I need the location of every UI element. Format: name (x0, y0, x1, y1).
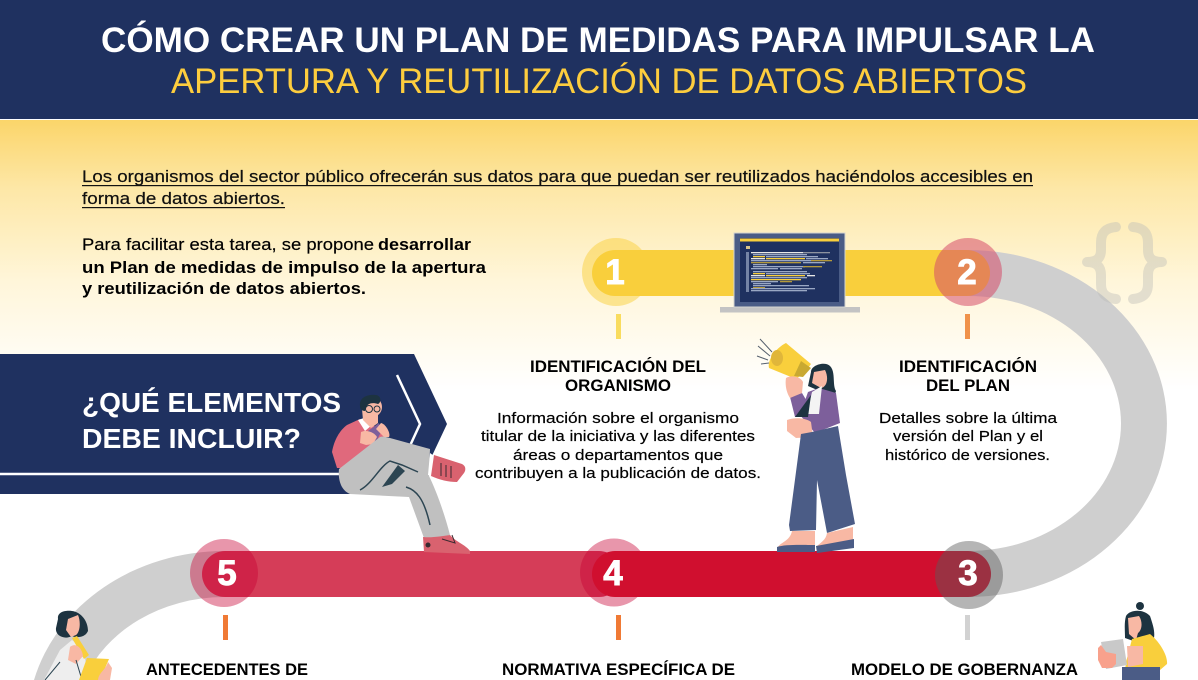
icon: laptop with code (720, 233, 860, 312)
figure: woman with tablet (1098, 602, 1167, 680)
gray curved path right (968, 250, 1167, 597)
title: CÓMO CREAR UN PLAN DE MEDIDAS PARA IMPULSAR LA (101, 20, 1095, 60)
title: APERTURA Y REUTILIZACIÓN DE DATOS ABIERTOS (171, 62, 1027, 101)
banner heading (82, 387, 341, 454)
proposal paragraph: Para facilitar esta tarea, se propone (82, 235, 374, 254)
number 4: 4 (603, 554, 623, 593)
tick step 5 (223, 615, 228, 640)
number 1: 1 (605, 253, 625, 292)
number 3: 3 (958, 554, 978, 593)
figure: man sitting with phone (332, 395, 470, 554)
proposal paragraph (82, 235, 487, 298)
step 4 halo (580, 538, 648, 606)
step 2 text: histórico de versiones. (885, 447, 1050, 464)
tick step 4 (616, 615, 621, 640)
step 3 halo (935, 541, 1003, 609)
step 1 text: contribuyen a la publicación de datos. (475, 465, 761, 482)
red bar (592, 551, 991, 597)
tick step 2 (965, 314, 970, 339)
step 2 halo (934, 238, 1002, 306)
step 1 text: Información sobre el organismo (497, 410, 739, 427)
step 1 text: ORGANISMO (565, 377, 671, 395)
step 3 heading: MODELO DE GOBERNANZA (851, 661, 1078, 679)
proposal paragraph: y reutilización de datos abiertos. (82, 279, 366, 298)
tick step 3 (965, 615, 970, 640)
step 5 halo (190, 539, 258, 607)
pink bar (202, 551, 622, 597)
step 1 text: áreas o departamentos que (513, 447, 723, 464)
step 1 halo (582, 238, 650, 306)
proposal paragraph: un Plan de medidas de impulso de la apertura (82, 258, 487, 277)
banner heading: ¿QUÉ ELEMENTOS (82, 387, 341, 418)
step 1 text (475, 357, 761, 482)
yellow bar (592, 250, 990, 296)
title (101, 20, 1095, 101)
proposal paragraph: desarrollar (378, 235, 471, 254)
step 1 text: IDENTIFICACIÓN DEL (530, 357, 706, 376)
step 2 text: Detalles sobre la última (879, 410, 1058, 427)
step 4 heading: NORMATIVA ESPECÍFICA DE (502, 660, 735, 679)
figure: woman with megaphone (757, 339, 855, 553)
step 5 heading: ANTECEDENTES DE (146, 661, 308, 679)
tick step 1 (616, 314, 621, 339)
intro paragraph (82, 167, 1033, 208)
icon: curly braces (1087, 227, 1162, 299)
step 2 text: versión del Plan y el (893, 428, 1043, 445)
intro paragraph: Los organismos del sector público ofrecerán sus datos para que puedan ser reutilizados haciéndolos accesibles en (82, 167, 1033, 186)
step 1 text: titular de la iniciativa y las diferentes (481, 428, 755, 445)
banner: what elements (0, 354, 447, 494)
gray curved path left (34, 551, 224, 680)
intro paragraph: forma de datos abiertos. (82, 189, 285, 208)
step 2 text: IDENTIFICACIÓN (899, 357, 1037, 376)
number 2: 2 (957, 253, 977, 292)
number 5: 5 (217, 554, 237, 593)
step 2 text (879, 357, 1058, 464)
step 2 text: DEL PLAN (926, 377, 1010, 395)
header band (0, 0, 1198, 119)
figure: woman with notebook (44, 611, 112, 680)
banner heading: DEBE INCLUIR? (82, 423, 301, 454)
